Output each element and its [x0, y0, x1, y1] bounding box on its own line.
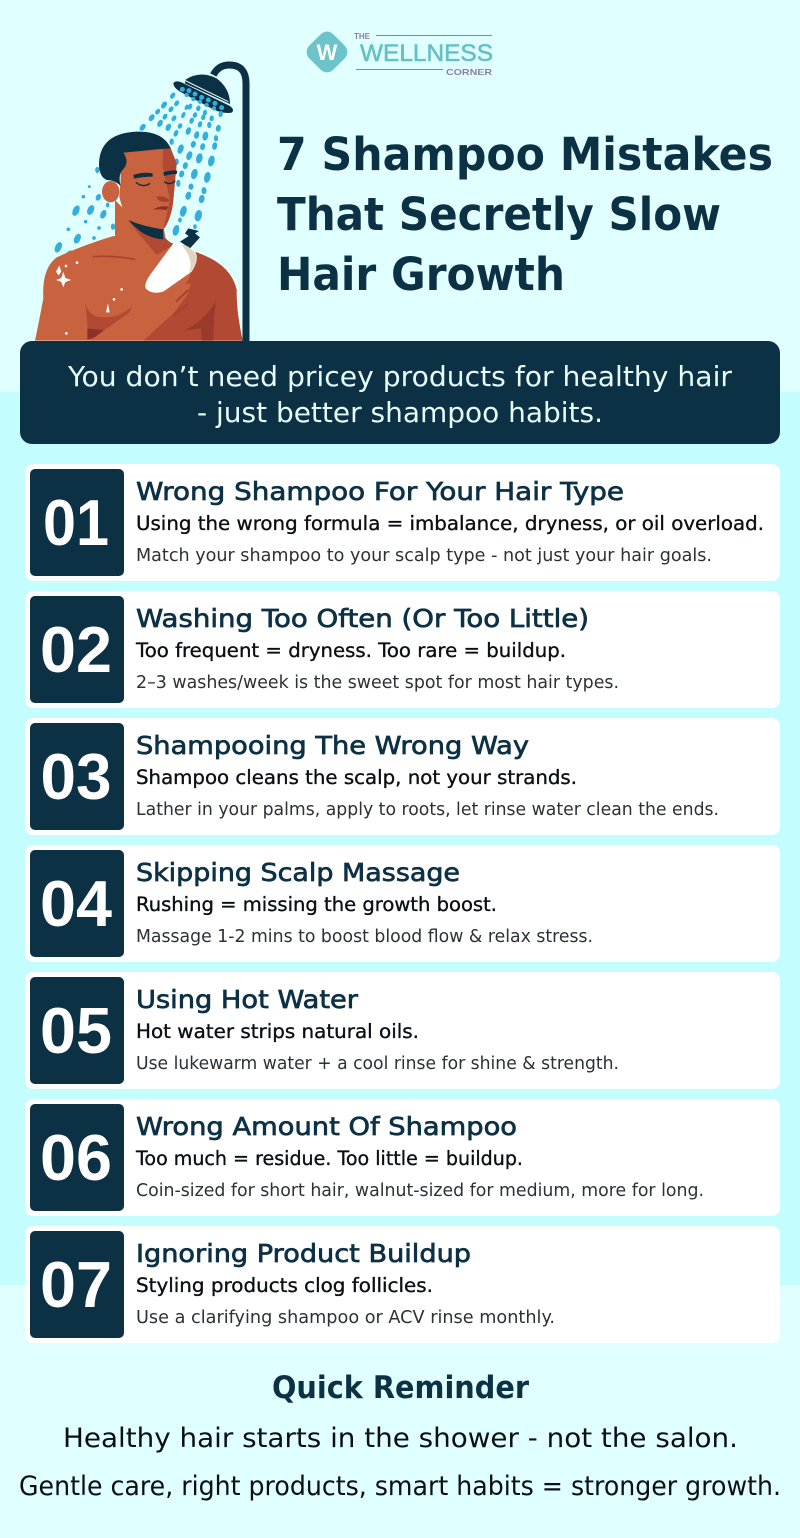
card 04: 04: [40, 867, 112, 940]
logo: The Wellness Corner: WELLNESS: [360, 40, 493, 67]
card 05: Hot water strips natural oils.: [136, 1020, 419, 1043]
card 07: 07: [40, 1248, 112, 1321]
card 03: Lather in your palms, apply to roots, let rinse water clean the ends.: [136, 800, 719, 820]
illustration: man showering: [35, 65, 246, 342]
card 04: Skipping Scalp Massage: [136, 858, 460, 887]
card 02: [25, 591, 780, 708]
card 01: 01: [43, 486, 109, 559]
shower pole and head: [173, 65, 246, 342]
quick reminder: Gentle care, right products, smart habits = stronger growth.: [19, 1471, 781, 1502]
card 07: Styling products clog follicles.: [136, 1274, 433, 1297]
card 06: 06: [40, 1121, 112, 1194]
card 01: Wrong Shampoo For Your Hair Type: [136, 477, 624, 506]
subtitle banner: - just better shampoo habits.: [197, 396, 603, 429]
card 05: [25, 972, 780, 1089]
shampoo bottle: [145, 228, 200, 293]
logo: The Wellness Corner: THE: [354, 31, 370, 41]
card 01: Match your shampoo to your scalp type - not just your hair goals.: [136, 546, 712, 566]
card 07: Use a clarifying shampoo or ACV rinse monthly.: [136, 1308, 555, 1328]
card 06: Too much = residue. Too little = buildup.: [135, 1147, 523, 1170]
card 05: 05: [40, 994, 112, 1067]
card 02: Washing Too Often (Or Too Little): [136, 604, 589, 633]
subtitle banner: [20, 341, 780, 444]
card 07: [25, 1226, 780, 1343]
quick reminder: [19, 1370, 781, 1502]
logo: The Wellness Corner: [303, 28, 493, 77]
title: That Secretly Slow: [277, 188, 721, 241]
card 02: 02: [40, 613, 112, 686]
card 01: [25, 464, 780, 581]
torso: [35, 200, 243, 341]
card 03: [25, 718, 780, 835]
title: Hair Growth: [277, 248, 565, 301]
card 03: 03: [40, 740, 112, 813]
quick reminder: Quick Reminder: [272, 1370, 530, 1406]
card 05: Using Hot Water: [136, 985, 359, 1014]
card 06: Wrong Amount Of Shampoo: [136, 1112, 517, 1141]
water droplets: [54, 87, 224, 260]
card 03: Shampoo cleans the scalp, not your strands.: [136, 766, 577, 789]
card 02: 2–3 washes/week is the sweet spot for most hair types.: [136, 673, 619, 693]
card 04: Massage 1-2 mins to boost blood flow & relax stress.: [136, 927, 593, 947]
card 03: Shampooing The Wrong Way: [136, 731, 529, 760]
quick reminder: Healthy hair starts in the shower - not the salon.: [63, 1423, 738, 1454]
title: 7 Shampoo Mistakes: [277, 128, 773, 181]
sparkles: [56, 261, 123, 335]
logo: The Wellness Corner: CORNER: [446, 67, 492, 77]
card 04: Rushing = missing the growth boost.: [136, 893, 497, 916]
card 04: [25, 845, 780, 962]
card 01: Using the wrong formula = imbalance, dryness, or oil overload.: [136, 512, 764, 535]
card 05: Use lukewarm water + a cool rinse for shine & strength.: [136, 1054, 619, 1074]
title: [277, 128, 773, 301]
head and face: [99, 132, 177, 229]
card 06: [25, 1099, 780, 1216]
logo: The Wellness Corner: W: [317, 40, 338, 65]
card 06: Coin-sized for short hair, walnut-sized for medium, more for long.: [136, 1181, 704, 1201]
card 07: Ignoring Product Buildup: [136, 1239, 471, 1268]
subtitle banner: You don’t need pricey products for healthy hair: [67, 360, 732, 393]
card 02: Too frequent = dryness. Too rare = buildup.: [135, 639, 566, 662]
